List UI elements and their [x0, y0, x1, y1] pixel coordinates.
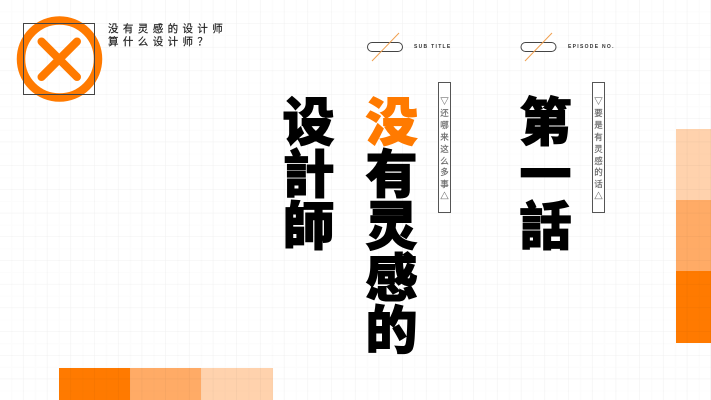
tag: right vertical note: 话 — [594, 178, 603, 190]
heading: episode: 第一話 — [508, 95, 583, 251]
tag: right vertical note: ▽ — [594, 95, 603, 107]
right colour bars — [676, 129, 711, 343]
tag: right vertical note — [592, 82, 605, 213]
tag: right vertical note: 灵 — [594, 143, 603, 155]
top-left caption: 没有灵感的设计师 — [108, 23, 227, 35]
icon: subtitle pill with slash — [367, 32, 403, 62]
tag: left vertical note: 哪 — [440, 119, 449, 131]
tag: left vertical note: 事 — [440, 178, 449, 190]
tag: left vertical note — [438, 82, 451, 213]
subtitle label: SUB TITLE — [414, 44, 452, 50]
tag: left vertical note: 还 — [440, 107, 449, 119]
tag: left vertical note: 多 — [440, 166, 449, 178]
top-left caption: 算什么设计师？ — [108, 36, 212, 48]
tag: right vertical note: 感 — [594, 155, 603, 167]
tag: right vertical note: 有 — [594, 131, 603, 143]
tag: left vertical note: △ — [440, 190, 449, 202]
icon: orange cross in circle — [16, 16, 102, 102]
tag: right vertical note: 是 — [594, 119, 603, 131]
tag: left vertical note: 这 — [440, 143, 449, 155]
icon: episode pill with slash — [520, 32, 556, 62]
bottom colour bars — [59, 368, 273, 400]
tag: left vertical note: 来 — [440, 131, 449, 143]
tag: right vertical note: △ — [594, 190, 603, 202]
tag: left vertical note: 么 — [440, 155, 449, 167]
episode label: EPISODE NO. — [568, 44, 615, 50]
tag: left vertical note: ▽ — [440, 95, 449, 107]
heading: designer: 设計師 — [271, 95, 346, 251]
heading: no inspiration: 没 有灵感的 — [354, 95, 429, 355]
tag: right vertical note: 要 — [594, 107, 603, 119]
top-left caption — [108, 23, 227, 48]
tag: right vertical note: 的 — [594, 166, 603, 178]
